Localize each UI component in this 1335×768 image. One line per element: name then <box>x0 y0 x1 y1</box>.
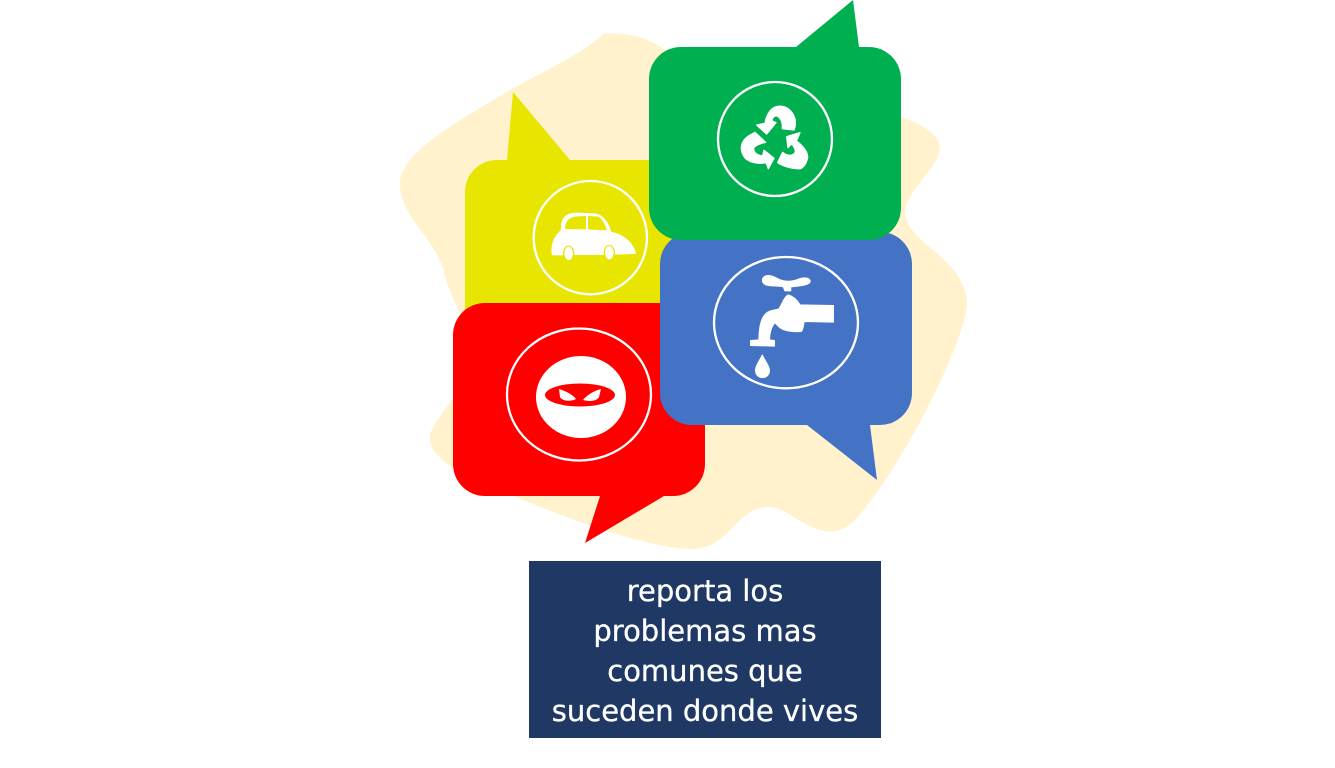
blue bubble shape <box>660 232 912 480</box>
background blob <box>400 34 967 549</box>
icon: ninja <box>507 328 651 460</box>
blue speech bubble: faucet <box>660 232 912 480</box>
icon: faucet <box>714 257 858 388</box>
icon: car <box>534 181 647 294</box>
caption text: reporta los <box>627 574 783 608</box>
green bubble shape <box>649 0 901 240</box>
icon: recycling <box>718 82 832 196</box>
green speech bubble: recycling <box>649 0 901 240</box>
caption text <box>552 574 858 728</box>
yellow speech bubble: car <box>465 92 717 352</box>
caption box <box>529 561 881 738</box>
yellow bubble shape <box>465 92 717 352</box>
red bubble shape <box>453 303 705 543</box>
red speech bubble: ninja <box>453 303 705 543</box>
caption text: suceden donde vives <box>552 694 858 728</box>
caption text: comunes que <box>607 654 803 688</box>
caption text: problemas mas <box>593 614 817 648</box>
